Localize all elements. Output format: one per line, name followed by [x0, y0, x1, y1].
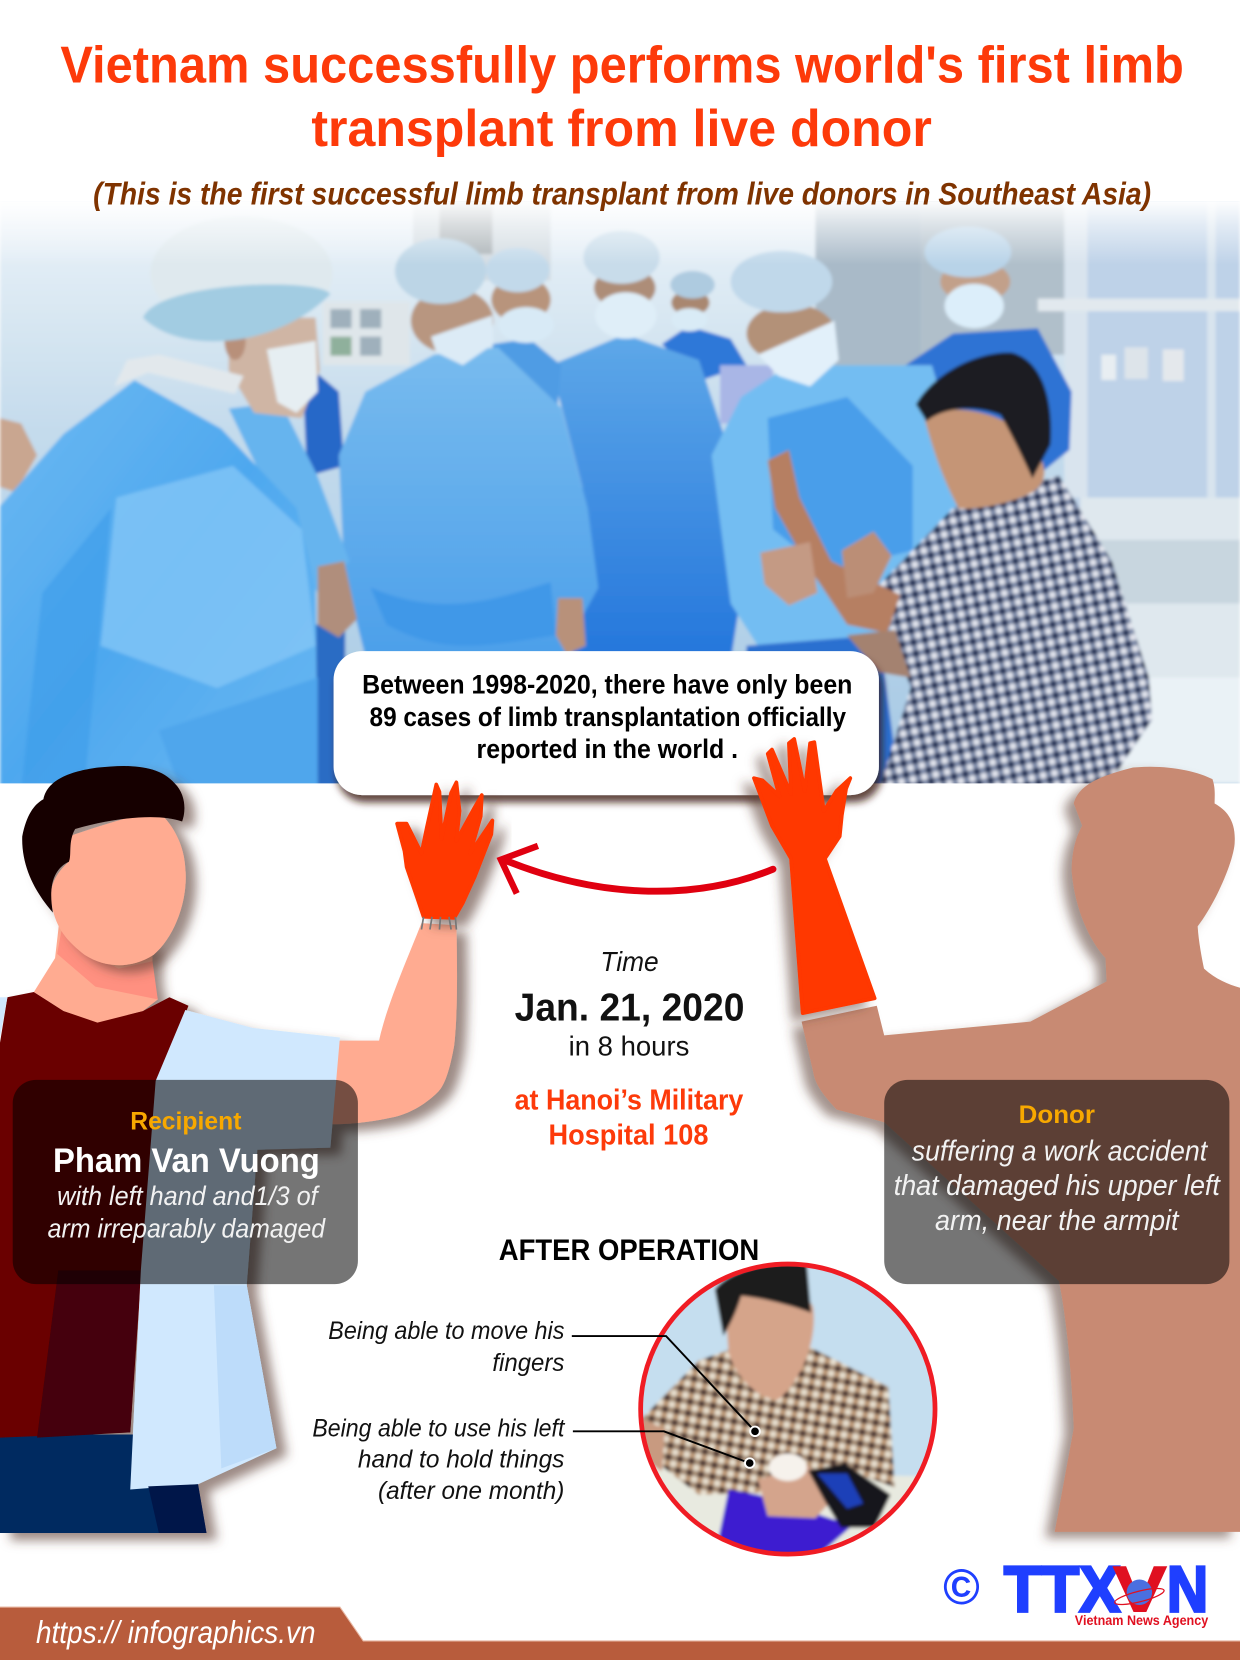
callout: 89 cases of limb transplantation: Between 1998-2020, there have only been — [362, 669, 852, 699]
text block: moving fingers: Being able to move his — [328, 1317, 565, 1345]
text block: moving fingers: fingers — [492, 1349, 565, 1377]
logo: TTXVN Vietnam News Agency: N — [1167, 1553, 1208, 1625]
figure: recipient — [0, 766, 457, 1533]
panel: donor info box: suffering a work accident — [912, 1135, 1208, 1167]
neck shadow band — [57, 931, 158, 999]
panel: recipient info box: Pham Van Vuong — [53, 1142, 320, 1180]
jeans — [0, 1435, 206, 1533]
heading: after operation: AFTER OPERATION — [499, 1234, 759, 1267]
dark shirt shade — [37, 1270, 141, 1438]
arrow: from donor to recipient — [501, 846, 773, 894]
text block: time and place: at Hanoi’s Military — [515, 1084, 743, 1116]
text block: holding things: (after one month) — [378, 1477, 564, 1505]
patient — [877, 475, 1152, 789]
text block: time and place: Hospital 108 — [549, 1119, 709, 1151]
footer bar with website tab: https:// infographics.vn — [36, 1614, 316, 1650]
title — [60, 36, 1184, 157]
callout: 89 cases of limb transplantation: 89 cases of limb transplantation officially — [370, 702, 846, 732]
logo: TTXVN Vietnam News Agency: V — [1113, 1553, 1167, 1625]
panel: recipient info box: Recipient — [130, 1108, 242, 1136]
logo: TTXVN Vietnam News Agency: Vietnam News Agency — [1075, 1613, 1209, 1628]
staples — [421, 917, 456, 930]
title: Vietnam successfully performs world's first limb — [60, 36, 1184, 94]
footer bar with website tab — [0, 1607, 1240, 1660]
callout: 89 cases of limb transplantation — [334, 651, 879, 795]
panel: donor info box: that damaged his upper left — [894, 1170, 1221, 1202]
text block: holding things: hand to hold things — [358, 1445, 565, 1473]
leader line: holding things — [573, 1431, 754, 1468]
text block: holding things — [312, 1415, 565, 1505]
leader line: moving fingers — [572, 1336, 760, 1436]
maroon shirt — [0, 992, 188, 1438]
panel: recipient info box: arm irreparably damaged — [48, 1214, 326, 1244]
text block: time and place: Time — [600, 946, 659, 977]
icon: transplanted hand on recipient — [397, 782, 492, 930]
logo: TTXVN Vietnam News Agency — [943, 1553, 1209, 1628]
panel: donor info box: arm, near the armpit — [935, 1205, 1180, 1237]
text block: time and place — [515, 946, 744, 1151]
logo: TTXVN Vietnam News Agency: TTX — [1004, 1553, 1120, 1625]
logo: TTXVN Vietnam News Agency: © — [943, 1559, 980, 1615]
text block: moving fingers — [328, 1317, 565, 1377]
heads — [229, 318, 320, 418]
panel: recipient info box — [13, 1080, 358, 1284]
arm — [330, 923, 457, 1124]
title: transplant from live donor — [311, 99, 932, 157]
icon: donated arm and hand — [754, 739, 875, 1013]
neck — [34, 921, 158, 1023]
panel: recipient info box: with left hand and1/3 of — [57, 1181, 320, 1211]
text block: time and place: in 8 hours — [569, 1031, 689, 1061]
text block: holding things: Being able to use his left — [312, 1415, 565, 1443]
callout: 89 cases of limb transplantation: reported in the world . — [477, 734, 738, 764]
panel: surgical team photo — [0, 191, 1240, 794]
panel: donor info box: Donor — [1019, 1101, 1095, 1129]
head and hair — [22, 766, 186, 965]
figure: donor silhouette — [802, 767, 1240, 1532]
text block: time and place: Jan. 21, 2020 — [515, 987, 744, 1030]
white vest — [130, 1010, 340, 1490]
photo: patient after operation — [635, 1260, 942, 1562]
panel: donor info box — [884, 1080, 1229, 1284]
